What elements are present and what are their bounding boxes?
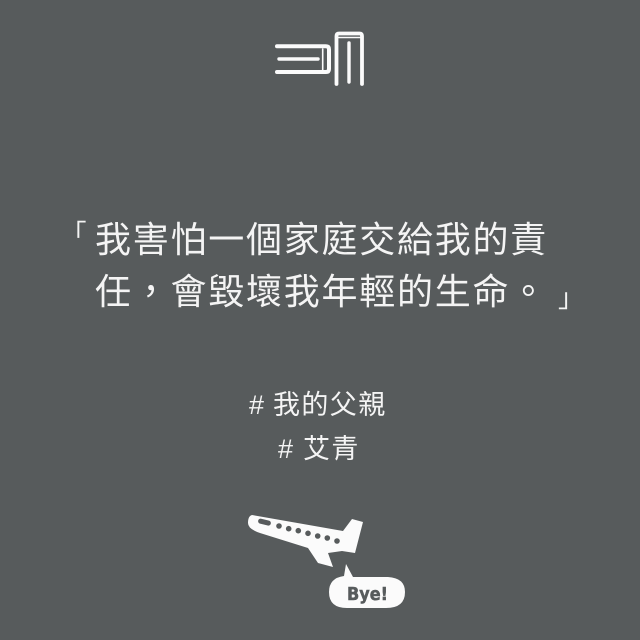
- speech bubble: [329, 564, 405, 608]
- speech bubble: Bye!: [347, 584, 388, 605]
- quote text: [60, 218, 584, 312]
- quote line 1: 我害怕一個家庭交給我的責: [95, 219, 548, 260]
- hashtag: my father: #: [249, 390, 265, 420]
- quote line 2: 任，會毀壞我年輕的生命。: [95, 271, 548, 312]
- hashtag: Ai Qing: #: [278, 434, 294, 464]
- closing bracket: 」: [558, 282, 584, 312]
- hashtags: [249, 390, 387, 464]
- hashtag: Ai Qing: [278, 434, 360, 464]
- hashtag: my father: 我的父親: [273, 390, 387, 420]
- airplane: [248, 515, 363, 567]
- opening bracket: 「: [60, 218, 87, 248]
- hashtag: Ai Qing: 艾青: [303, 434, 360, 464]
